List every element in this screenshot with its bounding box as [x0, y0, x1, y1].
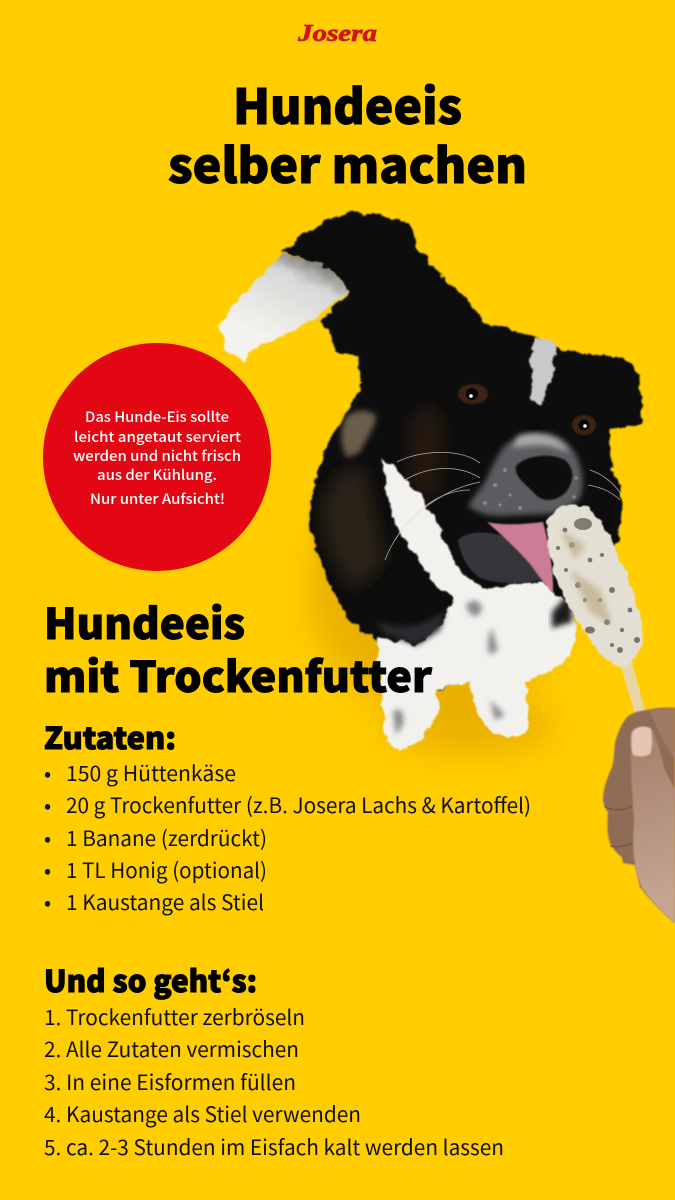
dog body silhouette [283, 212, 643, 690]
popsicle [547, 504, 648, 727]
ingredients list: • [44, 855, 51, 885]
ingredients list: 150 g Hüttenkäse [66, 758, 236, 788]
dog black patches on lower body [375, 610, 445, 645]
dog tail [220, 254, 350, 361]
title: selber machen [168, 127, 527, 197]
muzzle speckles [483, 468, 578, 510]
callout text: Das Hunde-Eis sollte [85, 407, 229, 427]
steps list: 1. Trockenfutter zerbröseln [44, 1002, 305, 1032]
back of hand [650, 708, 675, 760]
popsicle speckles [556, 518, 640, 653]
callout: red circle [43, 343, 271, 571]
dog white chest [377, 458, 575, 749]
ingredients list [44, 758, 531, 917]
ingredients list: 1 Banane (zerdrückt) [66, 823, 267, 853]
steps list [44, 1002, 504, 1162]
thumbnail [631, 727, 652, 756]
photo: dog [220, 212, 643, 749]
dog tongue [487, 522, 553, 593]
dog brown fur patch [341, 411, 376, 458]
hand [603, 708, 675, 923]
popsicle stick [620, 662, 648, 727]
ingredients list: 1 Kaustange als Stiel [66, 887, 264, 917]
logo: Josera: Josera [297, 21, 377, 47]
dog blaze [531, 340, 556, 406]
dog eyes [458, 384, 596, 435]
steps heading: Und so geht‘s: [44, 957, 257, 1001]
callout text: Nur unter Aufsicht! [90, 489, 225, 509]
dog muzzle [468, 434, 583, 516]
ingredients list: 20 g Trockenfutter (z.B. Josera Lachs & Kartoffel) [66, 790, 531, 820]
callout text: aus der Kühlung. [97, 465, 217, 485]
callout text: leicht angetaut serviert [74, 427, 241, 447]
ingredients list: • [44, 758, 51, 788]
steps list: 2. Alle Zutaten vermischen [44, 1034, 299, 1064]
steps list: 3. In eine Eisformen füllen [44, 1067, 296, 1097]
recipe heading: mit Trockenfutter [44, 644, 433, 705]
dog nose [516, 456, 572, 500]
ingredients list: 1 TL Honig (optional) [66, 855, 267, 885]
steps list: 4. Kaustange als Stiel verwenden [44, 1099, 361, 1129]
recipe heading [44, 591, 433, 705]
ingredients list: • [44, 823, 51, 853]
ingredients list: • [44, 887, 51, 917]
recipe heading: Hundeeis [44, 591, 245, 652]
title: Hundeeis [233, 68, 462, 138]
dog whiskers [385, 452, 622, 560]
ingredients list: • [44, 790, 51, 820]
thumb [631, 727, 675, 923]
popsicle ice [547, 504, 644, 668]
callout text: werden und nicht frisch [73, 446, 241, 466]
ingredients heading: Zutaten: [44, 714, 176, 758]
dog shadow [310, 465, 570, 753]
steps list: 5. ca. 2-3 Stunden im Eisfach kalt werden lassen [44, 1132, 504, 1162]
callout text [73, 407, 241, 509]
title [168, 68, 527, 197]
dog dark brown side [322, 469, 385, 590]
dog lower jaw [458, 532, 545, 583]
finger creases [604, 806, 634, 847]
